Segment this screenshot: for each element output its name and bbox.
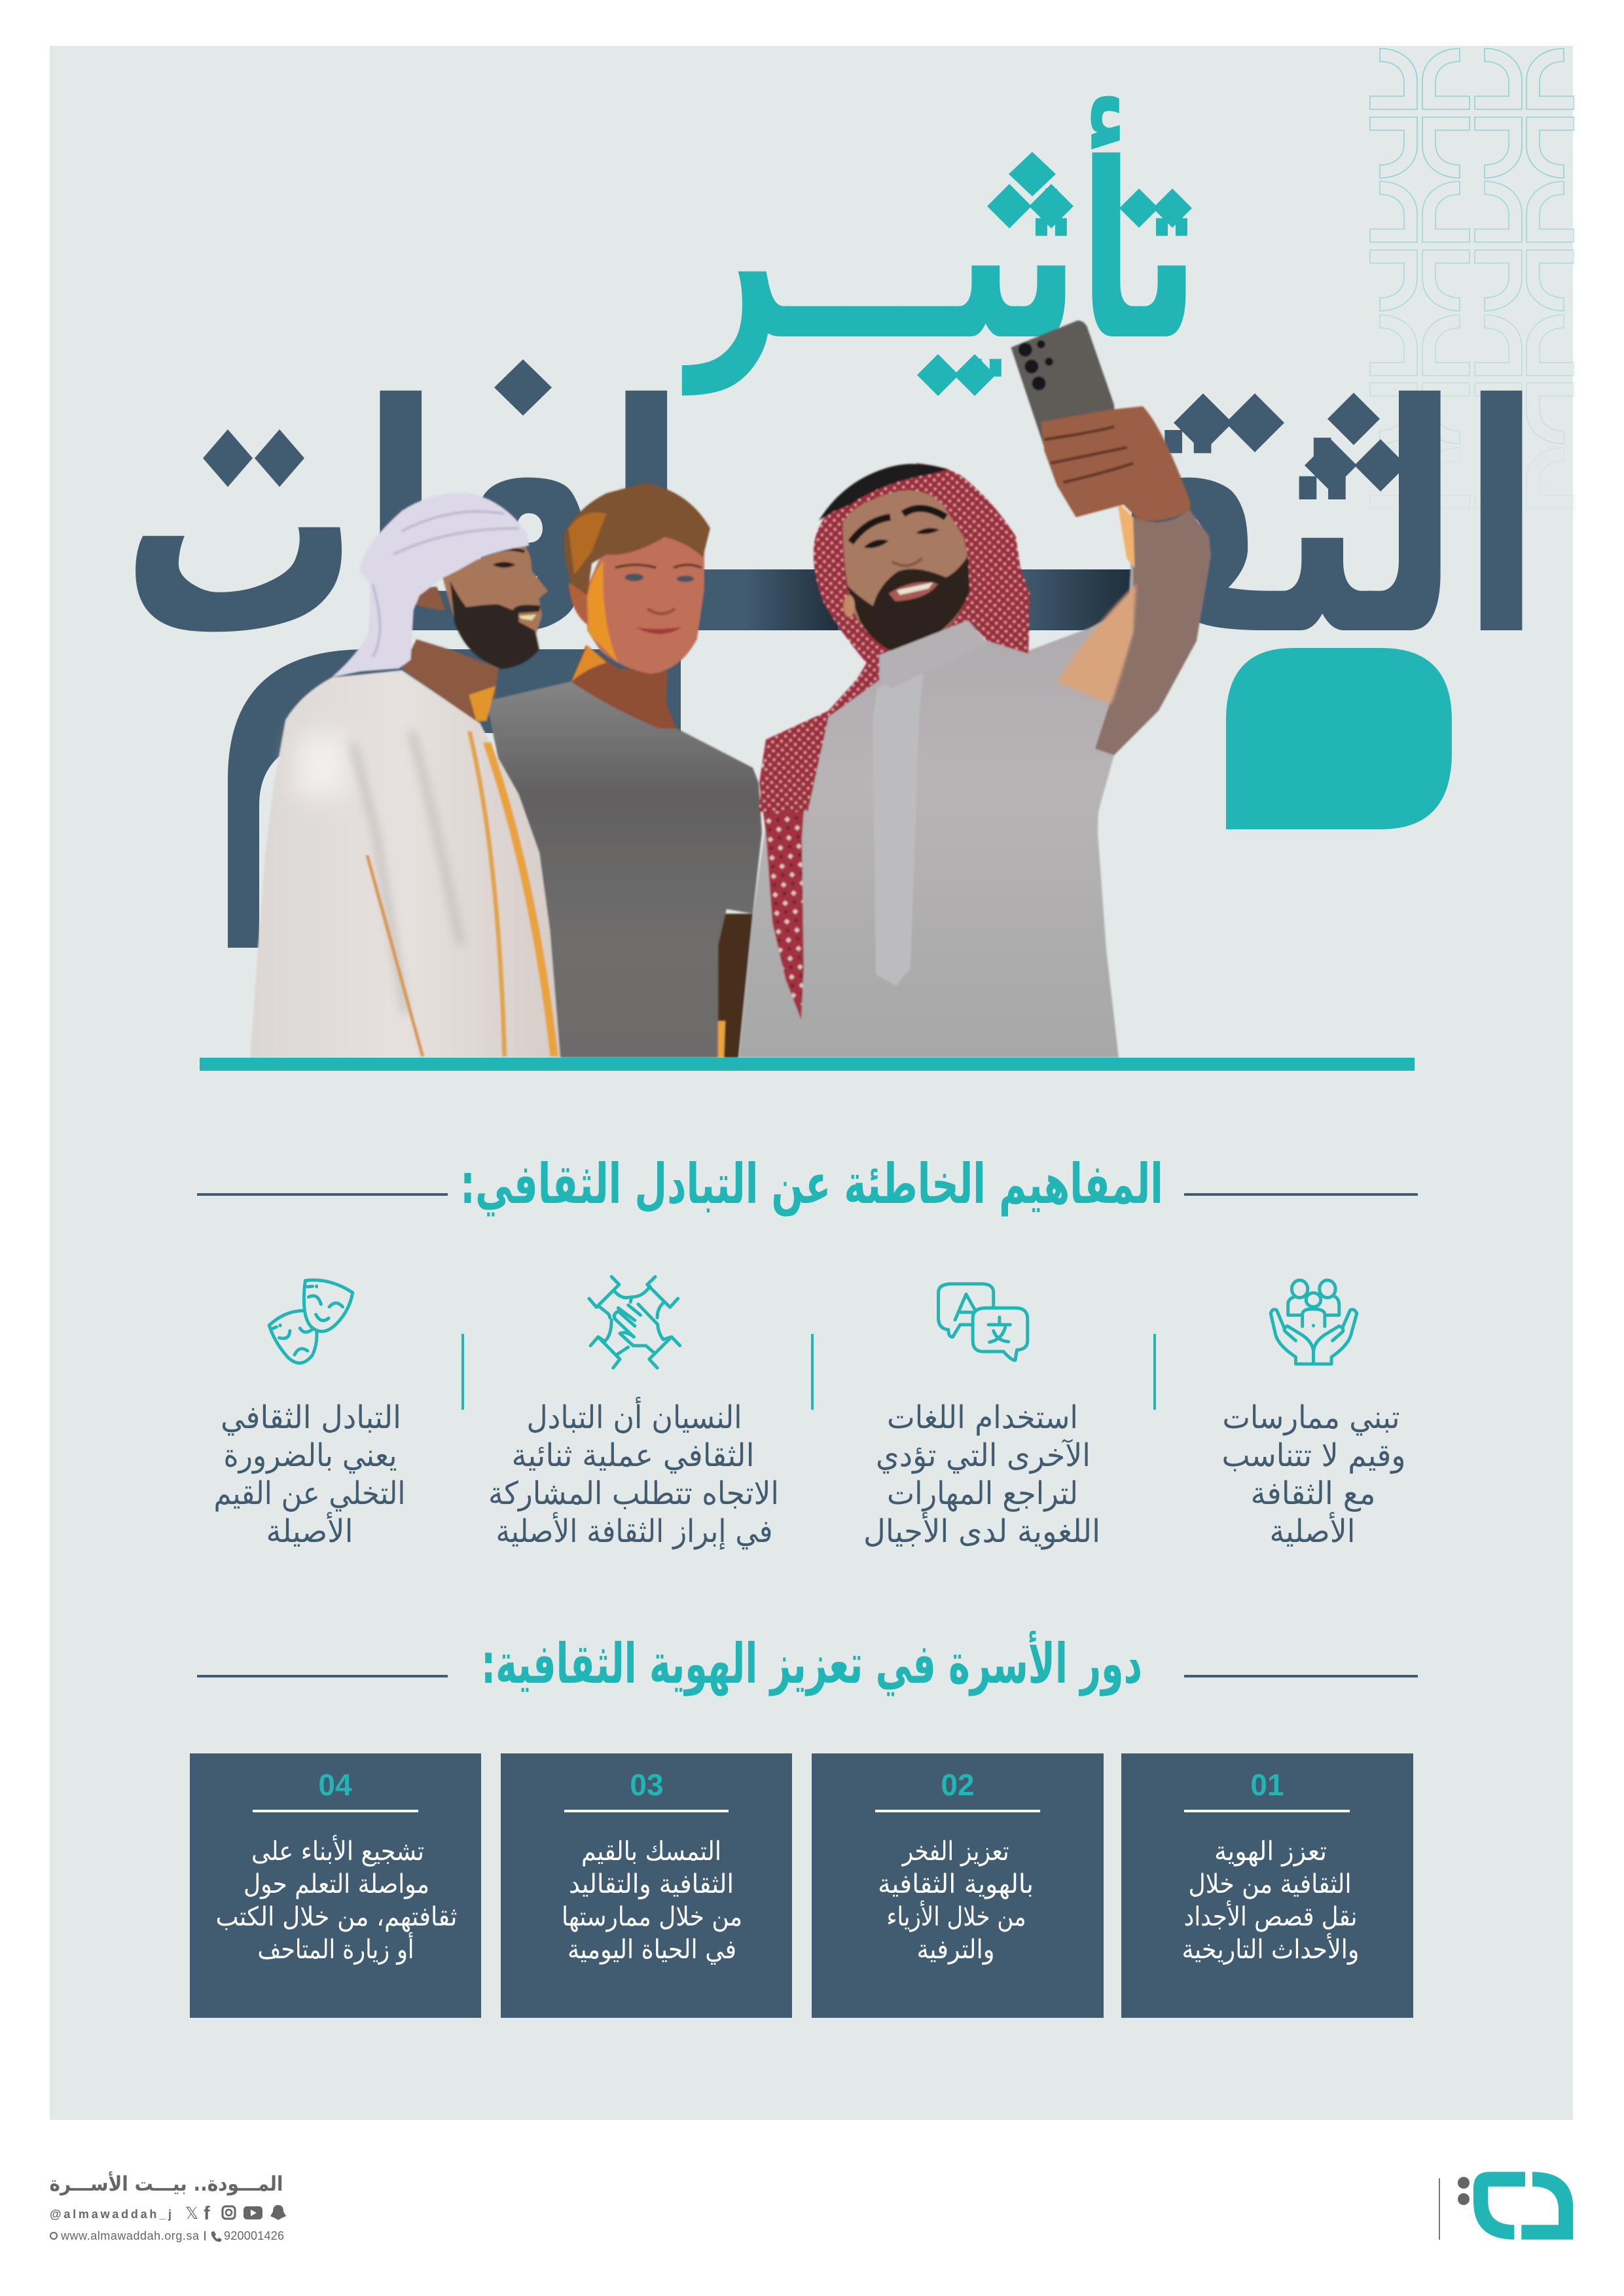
card 01: 01: [1250, 1768, 1284, 1802]
decorative pattern top right: [1370, 48, 1574, 509]
photo: three men taking a selfie: [250, 321, 1211, 1058]
text: يعني بالضرورة: [224, 1437, 397, 1474]
card 02: تعزيز الفخر: [901, 1837, 1009, 1867]
card 03: من خلال ممارستها: [562, 1902, 742, 1932]
card 03: [501, 1753, 792, 2018]
title diamonds: second line: [203, 359, 1407, 492]
card 02: 02: [941, 1768, 975, 1802]
background patches behind the diamonds: [204, 419, 544, 528]
footer: contact block: 920001426: [224, 2229, 284, 2242]
card 04: 04: [318, 1768, 352, 1802]
card 03: الثقافية والتقاليد: [569, 1869, 734, 1899]
footer: contact block: @almawaddah_j: [50, 2208, 171, 2221]
card 01: [1121, 1753, 1413, 2018]
title: first line: تأثيـــر: [681, 94, 1199, 397]
icon: translation bubbles: [939, 1284, 1028, 1360]
icon: theatre masks: [269, 1280, 353, 1363]
footer: contact block: المـــودة.. بيـــت الأســـرة: [50, 2171, 283, 2196]
card 01: تعزز الهوية: [1214, 1837, 1327, 1867]
text: في إبراز الثقافة الأصلية: [496, 1511, 772, 1550]
text: [213, 1399, 406, 1550]
title diamonds: first line: [917, 152, 1192, 396]
social icons: f: [204, 2203, 210, 2224]
text: اللغوية لدى الأجيال: [863, 1511, 1100, 1550]
card 02: والترفية: [916, 1935, 995, 1965]
text: الأصيلة: [266, 1511, 353, 1550]
social icons: [185, 2203, 286, 2224]
text: تبني ممارسات: [1223, 1399, 1399, 1436]
text: الثقافي عملية ثنائية: [512, 1437, 754, 1474]
text: لتراجع المهارات: [887, 1475, 1078, 1512]
card 02: [812, 1753, 1104, 2018]
text: الآخرى التي تؤدي: [876, 1437, 1091, 1474]
card 01: الثقافية من خلال: [1189, 1869, 1351, 1899]
decorative navy arch: [228, 649, 681, 948]
card 04: ثقافتهم، من خلال الكتب: [216, 1902, 457, 1932]
text: الأصلية: [1270, 1511, 1355, 1550]
column 4: masks icon and text: [213, 1280, 406, 1550]
footer: contact block: [50, 2171, 286, 2242]
decorative teal shape: [1226, 648, 1452, 829]
text: استخدام اللغات: [887, 1399, 1078, 1436]
hand: [1041, 406, 1190, 521]
left man: [250, 493, 560, 1058]
card 03: 03: [630, 1768, 664, 1802]
phone: [1011, 321, 1119, 505]
teal base rule: [200, 1058, 1415, 1071]
text: [488, 1397, 779, 1550]
heading: family role: دور الأسرة في تعزيز الهوية الثقافية:: [481, 1630, 1142, 1696]
text: وقيم لا تتناسب: [1221, 1437, 1406, 1474]
text: مع الثقافة: [1250, 1475, 1376, 1512]
text: [863, 1399, 1100, 1550]
middle man: [486, 483, 762, 1058]
text: التبادل الثقافي: [221, 1399, 401, 1436]
column 1: family icon and text: [1221, 1280, 1406, 1550]
icon: family in hands: [1271, 1280, 1357, 1364]
card 03: التمسك بالقيم: [581, 1837, 721, 1867]
card 04: مواصلة التعلم حول: [244, 1869, 429, 1899]
title connecting bar with shadow: [655, 569, 1178, 630]
footer: contact block: www.almawaddah.org.sa: [60, 2229, 200, 2242]
card 03: في الحياة اليومية: [568, 1935, 736, 1965]
text: النسيان أن التبادل: [526, 1397, 742, 1436]
right man: [739, 321, 1211, 1058]
column 3: joined hands icon and text: [488, 1277, 779, 1550]
card 04: تشجيع الأبناء على: [251, 1835, 424, 1867]
text: الاتجاه تتطلب المشاركة: [488, 1475, 779, 1512]
text: التخلي عن القيم: [213, 1475, 406, 1512]
separators: [461, 1334, 1156, 1410]
icon: joined hands: [589, 1277, 680, 1368]
card 04: [190, 1753, 481, 2018]
footer: logo: [1439, 2172, 1573, 2240]
card 02: من خلال الأزياء: [886, 1900, 1026, 1932]
card 01: والأحداث التاريخية: [1182, 1933, 1359, 1965]
card 04: أو زيارة المتاحف: [258, 1932, 414, 1965]
heading: misconceptions: المفاهيم الخاطئة عن التبادل الثقافي:: [460, 1152, 1163, 1217]
column 2: language icon and text: [863, 1284, 1100, 1550]
social icons: 𝕏: [185, 2204, 198, 2223]
text: [1221, 1399, 1406, 1550]
card 01: نقل قصص الأجداد: [1183, 1900, 1358, 1932]
card 02: بالهوية الثقافية: [878, 1869, 1034, 1899]
